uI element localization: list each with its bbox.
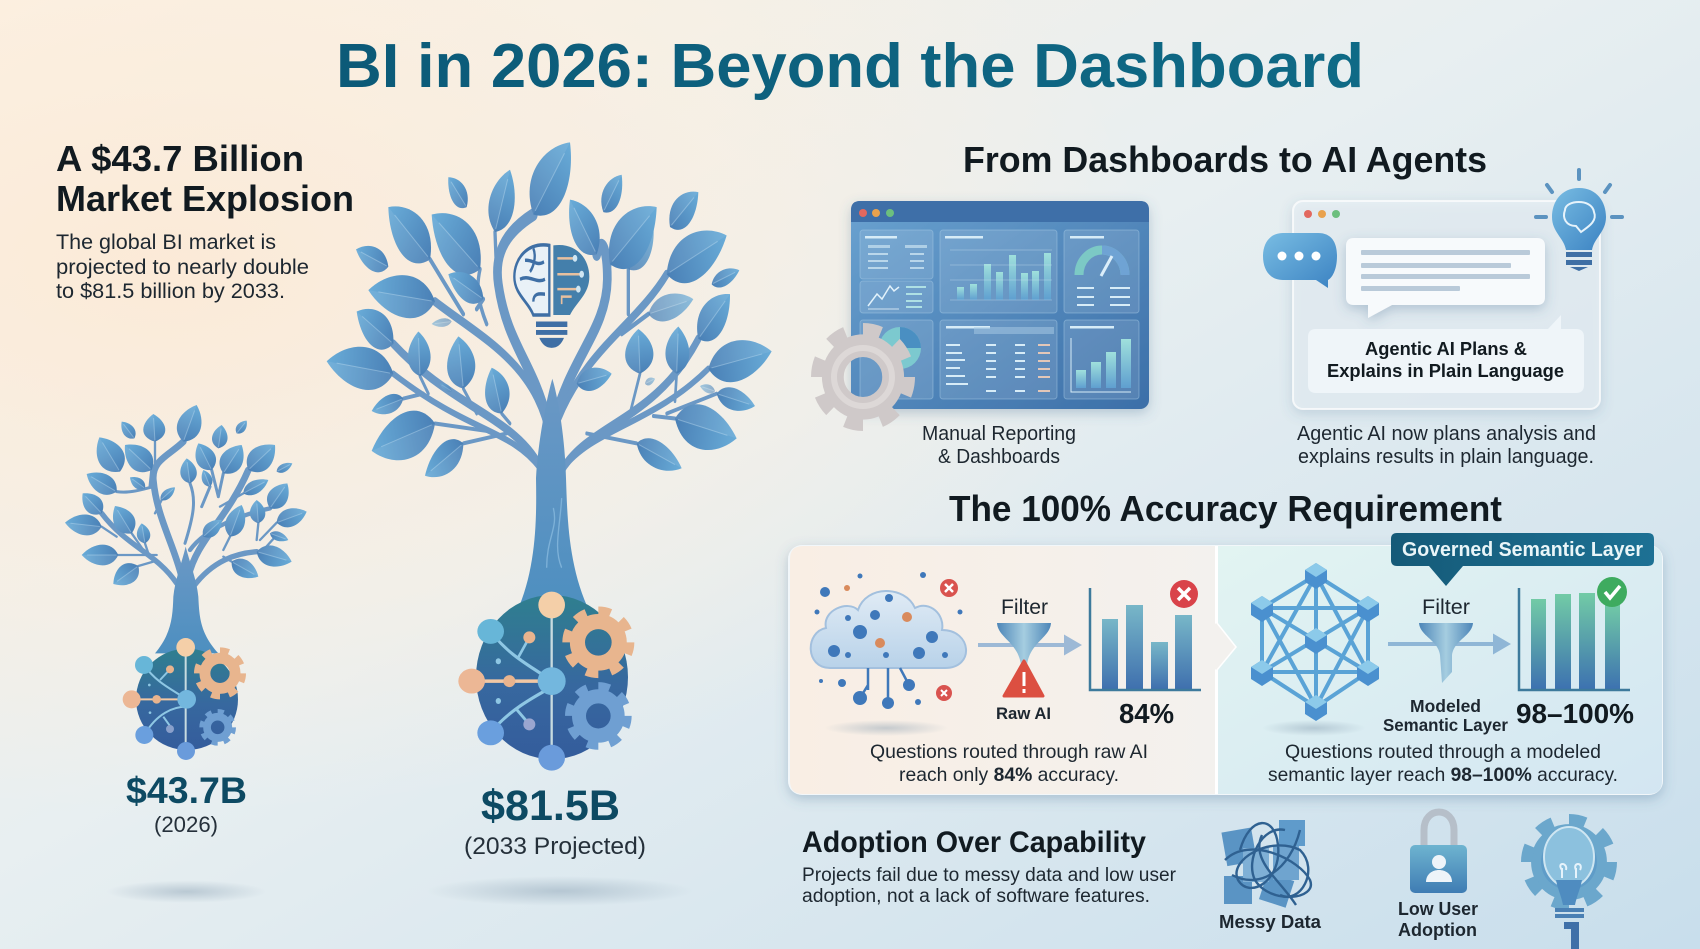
label: modeled semantic layer: Semantic Layer xyxy=(1383,715,1508,735)
caption: manual reporting xyxy=(922,423,1076,468)
label: low user adoption xyxy=(1398,899,1478,940)
value 2033: $81.5B xyxy=(481,782,620,830)
market heading: A $43.7 Billion xyxy=(56,138,304,179)
market description xyxy=(56,231,309,303)
brain lightbulb xyxy=(514,245,589,348)
panel: raw ai: Raw AI xyxy=(996,704,1051,723)
callout: governed semantic layer: Governed Semantic Layer xyxy=(1402,539,1643,561)
panel: accuracy comparison xyxy=(788,545,1663,795)
value 2033 xyxy=(464,782,646,860)
icon: gear xyxy=(817,329,909,425)
panel: raw ai: 84% xyxy=(1119,698,1174,729)
caption: semantic layer: Questions routed through a modeled xyxy=(1285,741,1601,763)
icon: messy data xyxy=(1221,820,1311,908)
small tree 2026 xyxy=(64,401,310,903)
panel: raw ai xyxy=(790,546,1216,794)
value 2026: (2026) xyxy=(154,812,218,837)
label: low user adoption: Low User xyxy=(1398,899,1478,919)
market heading: Market Explosion xyxy=(56,178,354,219)
chat message bubble xyxy=(1346,238,1545,318)
caption: semantic layer xyxy=(1268,741,1618,786)
icon: lock xyxy=(1410,812,1467,893)
market description: to $81.5 billion by 2033. xyxy=(56,280,285,303)
market description: projected to nearly double xyxy=(56,256,309,279)
value 2026: $43.7B xyxy=(126,769,247,811)
caption: agentic ai: explains results in plain language. xyxy=(1298,446,1594,468)
value 2033: (2033 Projected) xyxy=(464,833,646,860)
value 2026 xyxy=(126,769,247,837)
icon: brain lightbulb xyxy=(1536,170,1622,271)
heading: dashboards to agents: From Dashboards to AI Agents xyxy=(963,139,1487,180)
label: modeled semantic layer: Modeled xyxy=(1410,696,1481,716)
adoption description xyxy=(802,865,1177,907)
icon: noisy cloud xyxy=(811,572,966,709)
label box xyxy=(1308,315,1584,393)
label: low user adoption: Adoption xyxy=(1398,920,1477,940)
large tree 2033 xyxy=(325,127,774,906)
icon: gear lightbulb xyxy=(1527,820,1611,949)
callout: governed semantic layer xyxy=(1391,533,1654,586)
caption: semantic layer: semantic layer reach 98–100% accuracy. xyxy=(1268,764,1618,786)
label: messy data: Messy Data xyxy=(1219,912,1322,932)
market heading xyxy=(56,138,354,219)
agent window xyxy=(1263,201,1600,409)
title: BI in 2026: Beyond the Dashboard xyxy=(336,32,1364,101)
label box: Agentic AI Plans & xyxy=(1365,338,1527,359)
panel: semantic layer: 98–100% xyxy=(1516,698,1634,729)
caption: agentic ai xyxy=(1297,423,1596,468)
caption: raw ai xyxy=(870,741,1148,786)
panel: semantic layer: Filter xyxy=(1422,596,1470,619)
panel: raw ai: Filter xyxy=(1001,596,1048,619)
roots network xyxy=(458,592,630,771)
heading: adoption: Adoption Over Capability xyxy=(802,826,1146,859)
adoption description: Projects fail due to messy data and low user xyxy=(802,865,1177,886)
bar chart: raw ai accuracy xyxy=(1090,580,1201,690)
market description: The global BI market is xyxy=(56,231,276,254)
label box: Explains in Plain Language xyxy=(1327,360,1564,381)
caption: manual reporting: & Dashboards xyxy=(938,446,1060,468)
label: modeled semantic layer xyxy=(1383,696,1508,735)
arrow: raw flow xyxy=(978,638,1078,652)
icon: funnel warning xyxy=(997,623,1051,696)
blue typing bubble xyxy=(1263,233,1337,288)
icon: semantic network xyxy=(1251,563,1379,721)
dashboard window xyxy=(851,201,1149,409)
caption: raw ai: Questions routed through raw AI xyxy=(870,741,1148,763)
adoption description: adoption, not a lack of software features. xyxy=(802,886,1150,907)
heading: accuracy: The 100% Accuracy Requirement xyxy=(949,488,1502,529)
arrow: semantic flow xyxy=(1388,637,1507,651)
caption: manual reporting: Manual Reporting xyxy=(922,423,1076,445)
panel: semantic layer xyxy=(1215,546,1662,794)
bar chart: semantic accuracy xyxy=(1519,577,1630,690)
caption: agentic ai: Agentic AI now plans analysis and xyxy=(1297,423,1596,445)
icon: clean funnel xyxy=(1419,623,1473,683)
caption: raw ai: reach only 84% accuracy. xyxy=(899,764,1119,786)
